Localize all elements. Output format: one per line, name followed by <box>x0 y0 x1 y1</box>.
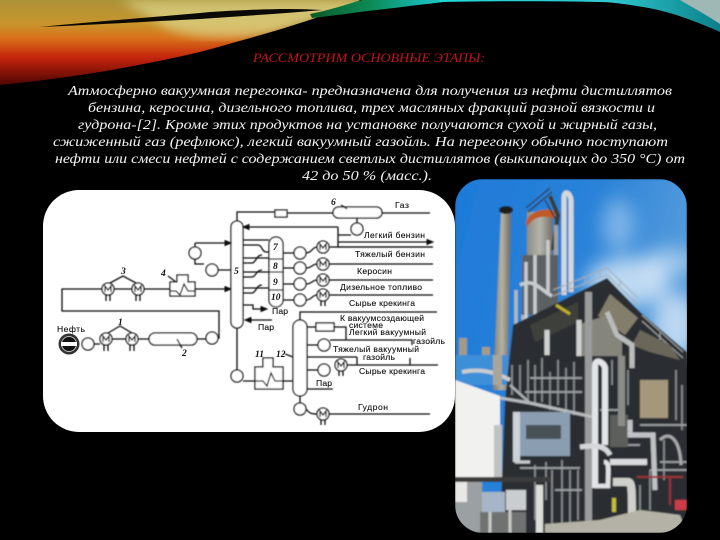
stream labels: Сырье крекинга <box>359 366 425 376</box>
stream labels: Керосин <box>357 266 392 276</box>
column bottom line <box>237 328 293 381</box>
stream labels: Сырье крекинга <box>349 298 415 308</box>
text block: description: нефти или смеси нефтей с содержанием светлых дистиллятов (выкипающих до 350 °C) от <box>55 152 685 167</box>
panel: process flow diagram <box>43 190 455 432</box>
equipment numbers <box>118 198 336 360</box>
title: РАССМОТРИМ ОСНОВНЫЕ ЭТАПЫ: <box>252 51 485 65</box>
stream labels: системе <box>349 320 383 330</box>
stream labels: Пар <box>258 322 274 332</box>
text block: description: сжиженный газ (рефлюкс), легкий вакуумный газойль. На перегонку обычно поступают <box>53 135 668 150</box>
main white pipes <box>595 362 605 488</box>
motors <box>100 333 112 345</box>
concrete column <box>585 292 592 525</box>
distillation column <box>526 210 554 256</box>
blue-silver equipment <box>513 412 570 456</box>
equipment numbers: 9 <box>273 278 278 288</box>
upper pipes <box>607 312 632 368</box>
equipment numbers: 11 <box>255 350 264 360</box>
stream labels: Тяжелый бензин <box>355 249 425 259</box>
tanks <box>482 492 505 512</box>
text block: description: гудрона-[2]. Кроме этих продуктов на установке получаются сухой и жирный газы, <box>78 118 657 133</box>
crude feed line <box>62 289 231 344</box>
under-deck concrete <box>598 294 638 335</box>
equipment numbers: 10 <box>271 293 281 303</box>
reflux of column 5 <box>195 242 231 244</box>
equipment numbers: 1 <box>118 318 123 328</box>
fine pipework texture <box>512 358 682 525</box>
vessel 2 <box>149 333 197 345</box>
decorative swoosh: top ribbon <box>0 0 720 85</box>
stream labels: газойль <box>363 352 396 362</box>
yellow beam <box>556 305 570 314</box>
stream labels: Легкий вакуумный <box>349 327 426 337</box>
column 5 <box>231 221 243 328</box>
stream labels: Газ <box>395 200 409 210</box>
furnace 4 <box>170 275 195 296</box>
building sky patch <box>455 355 507 385</box>
diagram lines and equipment <box>62 205 438 425</box>
text block: description: Атмосферно вакуумная перегонка- предназначена для получения из нефти дистиллятов <box>67 84 672 99</box>
stream labels: Гудрон <box>358 402 388 412</box>
stream labels: Пар <box>316 378 332 388</box>
stream labels: Нефть <box>57 324 86 334</box>
stream labels <box>57 200 446 412</box>
tan panels <box>640 380 668 418</box>
red pipes <box>637 477 683 505</box>
stream labels: К вакуумсоздающей <box>340 313 424 323</box>
tall pipes <box>564 193 571 295</box>
white building <box>455 380 500 477</box>
text block: description: 42 до 50 % (масс.). <box>302 169 432 184</box>
equipment numbers: 4 <box>160 269 166 279</box>
leaders <box>108 205 347 357</box>
platform and dark structure <box>500 278 687 533</box>
stream labels: Пар <box>272 306 288 316</box>
vacuum column 12 <box>300 312 437 320</box>
lower column piping <box>522 255 558 315</box>
furnace 11 <box>255 358 283 389</box>
tall stack <box>493 213 511 390</box>
bottom residue line <box>300 396 430 414</box>
equipment numbers: 12 <box>276 350 286 360</box>
ground <box>545 510 687 533</box>
text block: description: бензина, керосина, дизельного топлива, трех масляных фракций разной вязкости и <box>88 101 655 116</box>
roof pipe <box>500 398 593 417</box>
equipment numbers: 8 <box>273 262 278 272</box>
stream labels: газойль <box>413 336 446 346</box>
equipment numbers: 5 <box>234 267 239 277</box>
stream labels: Тяжелый вакуумный <box>333 344 419 354</box>
equipment numbers: 3 <box>120 267 126 277</box>
stream labels: Дизельное топливо <box>340 282 422 292</box>
overhead line and receiver 6 <box>237 212 430 221</box>
stream labels: Легкий бензин <box>364 230 425 240</box>
clouds <box>586 199 697 357</box>
photo: refinery installation <box>455 179 697 533</box>
sky <box>455 179 687 493</box>
equipment numbers: 2 <box>181 349 187 359</box>
equipment numbers: 6 <box>331 198 336 208</box>
equipment numbers: 7 <box>273 243 279 253</box>
railing <box>553 268 683 358</box>
icon: crude oil source <box>58 334 80 354</box>
storage canopy <box>455 477 551 482</box>
text block: description <box>53 84 685 184</box>
pumps <box>82 338 94 350</box>
small stacks <box>458 336 468 356</box>
side strippers 7-10 <box>243 240 269 309</box>
yellow hat <box>612 498 616 512</box>
